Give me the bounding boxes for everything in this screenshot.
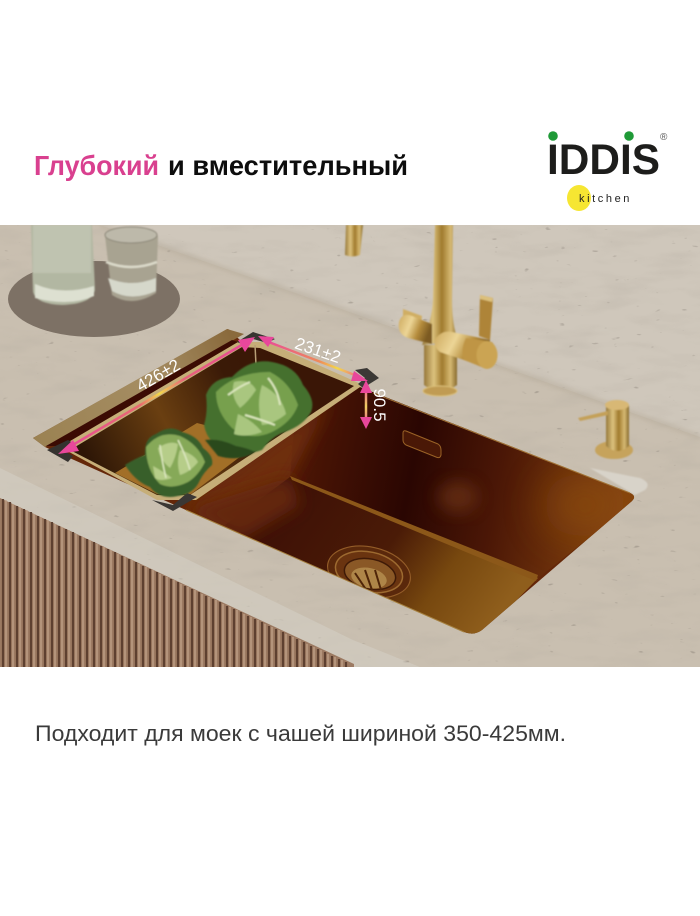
soft reflection [438,481,478,513]
dimension arrow: 231 [258,336,368,381]
description text: Подходит для моек с чашей шириной 350-425мм. [35,721,566,746]
dimension label: 426: 426±2 [133,355,183,395]
round placemat [8,261,180,337]
countertop surface [0,225,700,667]
colander inner basket [70,347,354,495]
dimension arrow: 90.5 [360,380,372,429]
corner bracket top [237,332,275,344]
yellow blob [567,185,591,211]
dimension label: 90.5: 90.5 [370,388,389,422]
corner bracket left [47,440,73,462]
soap dispenser [578,400,633,459]
dimension label: 231: 231±2 [292,334,343,367]
large lettuce [204,361,312,458]
logo: IDDIS kitchen: IDDIS [547,136,660,184]
kitchen wordmark: kitchen [579,193,631,205]
faucet spout behind [345,225,363,256]
logo dot right [624,131,634,141]
dark slit [46,340,238,446]
faucet stem [422,225,458,345]
faucet right lever [479,295,493,340]
counter rim highlight [373,393,630,493]
stone texture [0,225,700,667]
drain [327,545,411,598]
dimension arrow: 426 [58,337,255,454]
stone specks [0,225,700,667]
faucet left handle [402,308,423,320]
sink outline [33,329,634,634]
light bevel at sink corner [590,468,648,495]
corner bracket bottom [152,493,197,511]
overflow [403,431,441,458]
logo: IDDIS kitchen [547,131,668,211]
front edge of countertop [0,468,420,667]
title [34,150,408,181]
bottle [31,225,95,305]
water glass [105,227,158,301]
wood fluted cabinet [0,498,354,667]
wall backsplash [100,225,700,437]
left wall [228,410,326,489]
colander floor [115,423,240,494]
inner divider [255,345,256,365]
colander rim [60,342,363,500]
photo: kitchen scene [0,225,700,667]
sink bowl [33,329,650,640]
small lettuce [125,428,212,497]
faucet [345,225,498,396]
registered mark: ® [660,132,668,143]
counter edge shadow [100,225,700,437]
colander [33,329,379,511]
title: Глубокий [34,150,159,181]
basin floor [225,477,538,640]
right glow [543,473,627,537]
title: и вместительный [168,150,408,181]
faucet base [424,345,457,392]
corner bracket right [355,368,379,388]
logo dot left [548,131,558,141]
back wall [290,387,634,568]
basin floor left blend [212,478,302,538]
cutout inner edge [33,329,244,447]
basin step ledge [290,476,538,581]
faucet body cylinder [434,331,491,361]
